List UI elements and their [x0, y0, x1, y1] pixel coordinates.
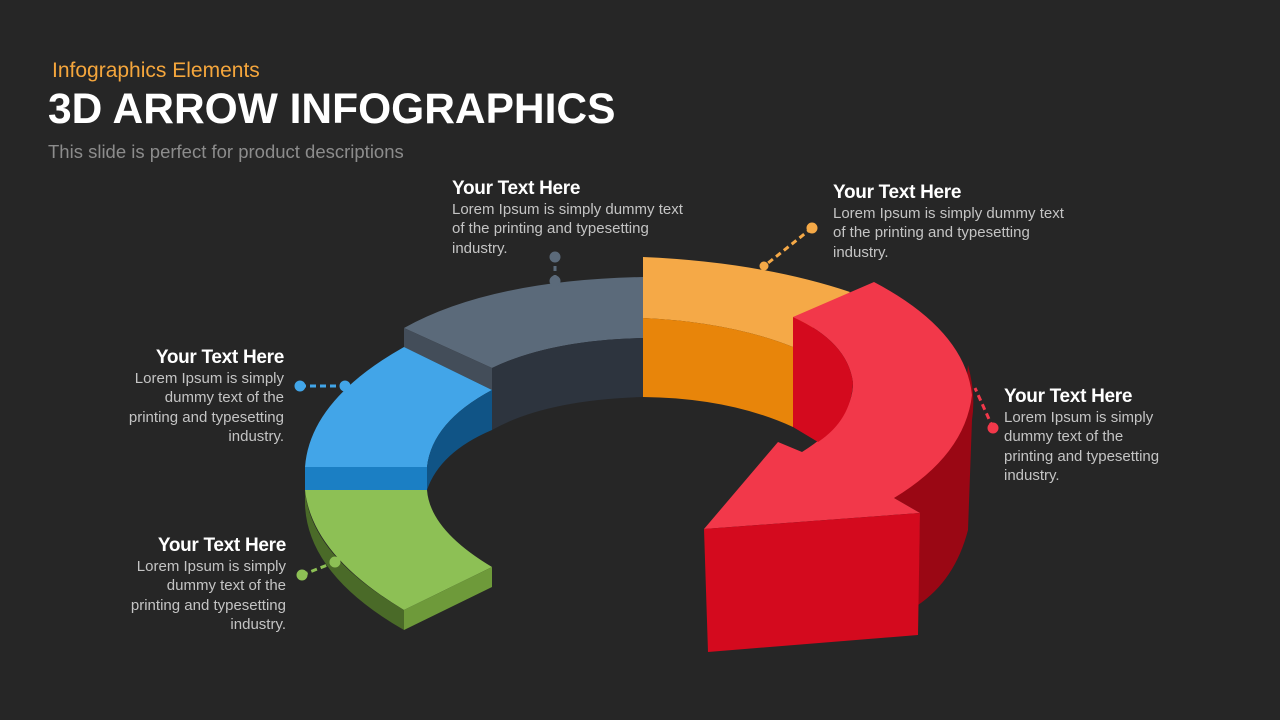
callout: green: Your Text Here: [158, 535, 286, 556]
callout: orange: [833, 182, 1064, 261]
segment: orange: [643, 257, 850, 427]
callout: green: printing and typesetting: [131, 597, 286, 614]
callout: top gray: industry.: [452, 240, 508, 257]
segment: blue: [305, 347, 492, 490]
callout: orange: Your Text Here: [833, 182, 961, 203]
callout: top gray: of the printing and typesetting: [452, 220, 649, 237]
callout: green: dummy text of the: [167, 577, 286, 594]
connector: gray: [550, 252, 560, 286]
callout: green: industry.: [230, 616, 286, 633]
callout: top gray: Lorem Ipsum is simply dummy text: [452, 201, 683, 218]
callout: top gray: Your Text Here: [452, 178, 580, 199]
callout: red: Lorem Ipsum is simply: [1004, 409, 1153, 426]
callout: red: Your Text Here: [1004, 386, 1132, 407]
callout: orange: industry.: [833, 244, 889, 261]
callout: blue: dummy text of the: [165, 389, 284, 406]
callout: green: Lorem Ipsum is simply: [137, 558, 286, 575]
callout: blue: Lorem Ipsum is simply: [135, 370, 284, 387]
subtitle: This slide is perfect for product descriptions: [48, 141, 404, 162]
connector: orange: [760, 223, 817, 270]
callout: blue: [129, 347, 284, 445]
connector: green: [297, 557, 340, 580]
segment: gray: [404, 277, 643, 430]
subtitle kicker: Infographics Elements: [52, 59, 260, 82]
connector: red: [975, 388, 998, 433]
segment: green: [305, 490, 492, 630]
connector: blue: [295, 381, 350, 391]
callout: red: [1004, 386, 1159, 484]
segment: red arrow: [704, 282, 973, 652]
callout: green: [131, 535, 286, 633]
callout: blue: industry.: [228, 428, 284, 445]
callout: top gray: [452, 178, 683, 257]
callout: blue: printing and typesetting: [129, 409, 284, 426]
callout: red: printing and typesetting: [1004, 448, 1159, 465]
callout: orange: of the printing and typesetting: [833, 224, 1030, 241]
callout: orange: Lorem Ipsum is simply dummy text: [833, 205, 1064, 222]
callout: red: dummy text of the: [1004, 428, 1123, 445]
callout: red: industry.: [1004, 467, 1060, 484]
title: 3D ARROW INFOGRAPHICS: [48, 86, 615, 133]
callout: blue: Your Text Here: [156, 347, 284, 368]
